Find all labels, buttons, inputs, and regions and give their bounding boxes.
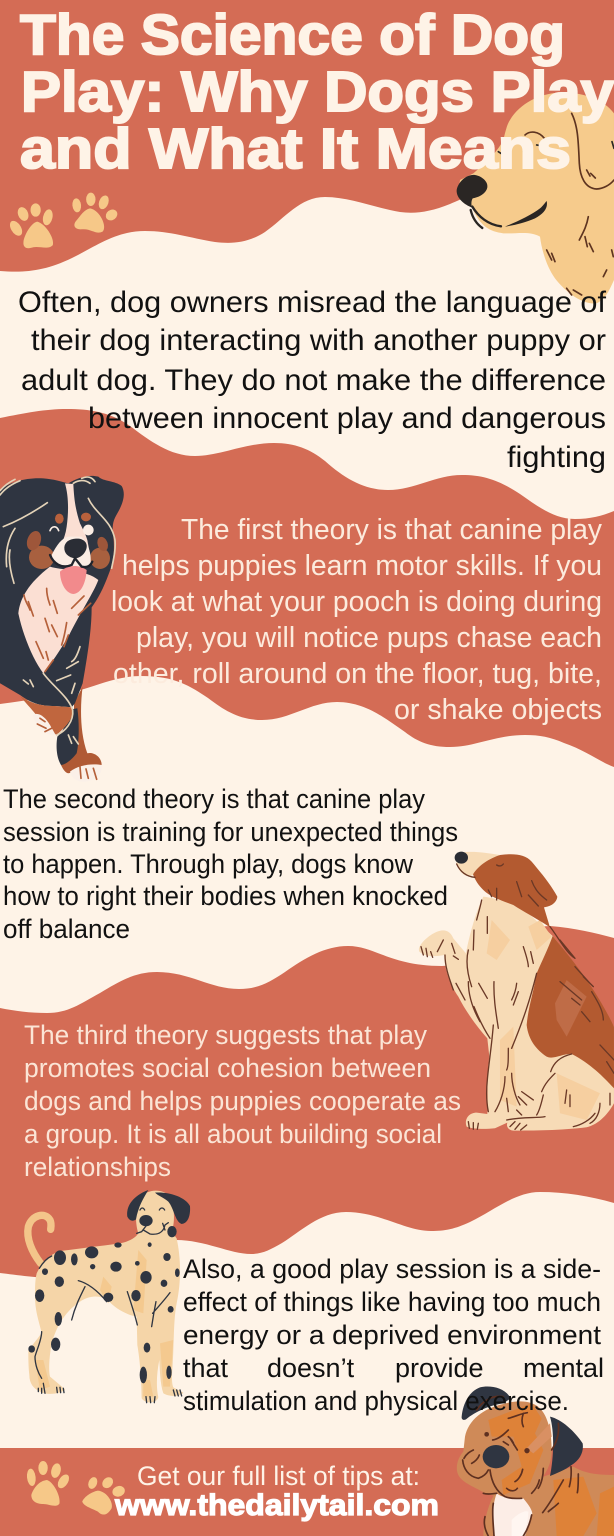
text block: fourth paragraph: Also, a good play session is a side-	[183, 1254, 601, 1284]
text block: first theory: helps puppies learn motor skills. If you	[122, 550, 602, 582]
text block: introduction: fighting	[507, 441, 606, 474]
text block: footer call to action: Get our full list of tips at:	[137, 1461, 420, 1491]
text block: fourth paragraph: effect of things like having too much	[183, 1287, 601, 1317]
text block: first theory: The first theory is that canine play	[181, 514, 602, 546]
heading: title: Play: Why Dogs Play	[21, 60, 614, 124]
text block: third theory	[24, 1020, 461, 1182]
text block: first theory: play, you will notice pups chase each	[136, 622, 602, 654]
text block: first theory: other, roll around on the floor, tug, bite,	[113, 658, 602, 690]
panel: footer band	[0, 1448, 614, 1536]
panel: third theory wave background	[0, 926, 614, 1278]
text block: second theory: The second theory is that canine play	[3, 784, 425, 814]
text block: fourth paragraph: doesn’t	[267, 1353, 355, 1383]
illustration: dalmatian	[28, 1190, 190, 1403]
text block: fourth paragraph: energy or a deprived environment	[183, 1320, 602, 1350]
illustration: boxer dog	[457, 1387, 614, 1536]
text block: first theory	[111, 514, 602, 726]
text block: fourth paragraph: mental	[523, 1353, 604, 1383]
text block: third theory: dogs and helps puppies cooperate as	[24, 1086, 461, 1116]
illustration: sitting collie	[419, 852, 614, 1131]
text block: first theory: look at what your pooch is doing during	[111, 586, 602, 618]
text block: introduction: their dog interacting with another puppy or	[31, 324, 606, 357]
text block: second theory: how to right their bodies when knocked	[3, 881, 448, 911]
text block: second theory	[3, 784, 458, 944]
text block: introduction: Often, dog owners misread the language of	[18, 286, 607, 319]
text block: third theory: relationships	[24, 1152, 171, 1182]
panel: first theory wave background	[0, 409, 614, 767]
text block: fourth paragraph: provide	[395, 1353, 484, 1383]
text block: second theory: off balance	[3, 914, 130, 944]
icon: footer paw prints	[26, 1461, 127, 1515]
illustration: bernese mountain dog	[0, 476, 124, 782]
text block: first theory: or shake objects	[394, 694, 602, 726]
text block: introduction	[18, 286, 607, 474]
heading: title: and What It Means	[20, 117, 571, 181]
text block: fourth paragraph	[183, 1254, 604, 1416]
link: website url: www.thedailytail.com	[114, 1489, 439, 1522]
panel: header wave background	[0, 0, 614, 272]
text block: fourth paragraph: stimulation and physical exercise.	[183, 1386, 569, 1416]
text block: second theory: to happen. Through play, dogs know	[3, 849, 413, 879]
heading: title: The Science of Dog	[20, 3, 565, 67]
text block: footer call to action	[114, 1461, 439, 1522]
text block: fourth paragraph: that	[183, 1353, 229, 1383]
text block: introduction: adult dog. They do not make the difference	[21, 364, 606, 397]
icon: header paw prints	[7, 193, 120, 248]
text block: introduction: between innocent play and dangerous	[88, 402, 606, 435]
icon: golden retriever head	[457, 93, 614, 303]
text block: third theory: The third theory suggests that play	[24, 1020, 427, 1050]
text block: third theory: promotes social cohesion between	[24, 1053, 431, 1083]
text block: second theory: session is training for unexpected things	[3, 817, 458, 847]
text block: third theory: a group. It is all about building social	[24, 1119, 442, 1149]
heading: title	[20, 3, 614, 181]
